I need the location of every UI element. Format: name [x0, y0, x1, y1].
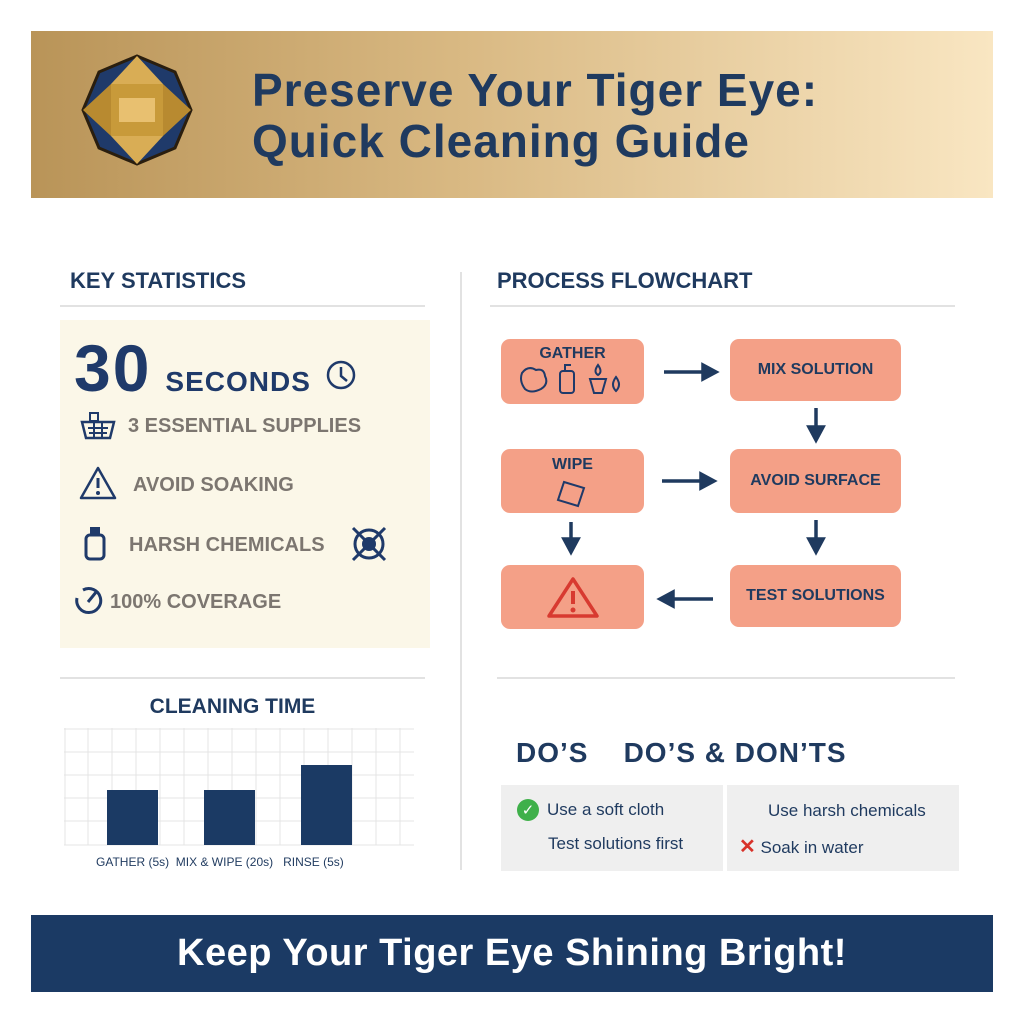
heading: cleaning time: CLEANING TIME: [150, 695, 315, 718]
title: Preserve Your Tiger Eye:: [252, 64, 818, 116]
icon: tiger eye gem: [81, 54, 193, 166]
stat: 30 seconds: SECONDS: [165, 366, 311, 397]
step: wipe: [501, 449, 644, 513]
panel: key statistics: [60, 320, 430, 648]
don't: soak: ✕ Soak in water: [739, 836, 864, 858]
step: gather: GATHER: [539, 345, 606, 362]
stat: supplies: [80, 412, 361, 440]
step: warning: [501, 565, 644, 629]
footer banner: [31, 915, 993, 992]
do: soft cloth: Use a soft cloth: [547, 800, 664, 819]
do: test: Test solutions first: [548, 834, 683, 853]
stat: coverage: 100% COVERAGE: [110, 591, 281, 613]
step: test solutions: [730, 565, 901, 627]
stat: supplies: 3 ESSENTIAL SUPPLIES: [128, 415, 361, 437]
heading: process flowchart: PROCESS FLOWCHART: [497, 268, 752, 293]
step: mix solution: MIX SOLUTION: [758, 361, 873, 378]
heading: key statistics: KEY STATISTICS: [70, 268, 246, 293]
title: [252, 64, 818, 167]
bar chart: [64, 728, 414, 869]
step: wipe: WIPE: [552, 456, 593, 473]
stat: avoid soaking: AVOID SOAKING: [133, 474, 294, 496]
step: gather: [501, 339, 644, 404]
stat: harsh chemicals: HARSH CHEMICALS: [129, 534, 325, 556]
bar chart: GATHER (5s) MIX & WIPE (20s) RINSE (5s): [96, 855, 344, 869]
do: soft cloth: [517, 799, 664, 821]
flowchart: [501, 339, 901, 629]
do: soft cloth: ✓: [522, 802, 534, 819]
stat: coverage: [75, 587, 281, 614]
table: do's and don'ts: [501, 785, 959, 871]
stat: 30 seconds: 30: [74, 331, 151, 405]
step: avoid surface: [730, 449, 901, 513]
stat: harsh chemicals: [84, 527, 386, 561]
step: avoid surface: AVOID SURFACE: [750, 472, 881, 489]
stat: avoid soaking: [80, 466, 294, 500]
heading: do's and don'ts: DO’S DO’S & DON’TS: [516, 737, 847, 768]
don't: harsh: Use harsh chemicals: [768, 801, 926, 820]
footer banner: Keep Your Tiger Eye Shining Bright!: [177, 932, 847, 974]
arrows: [561, 362, 826, 609]
divider: [460, 272, 462, 870]
step: mix solution: [730, 339, 901, 401]
title: Quick Cleaning Guide: [252, 115, 750, 167]
step: test solutions: TEST SOLUTIONS: [746, 587, 885, 604]
stat: 30 seconds: [74, 331, 356, 405]
header banner: [31, 31, 993, 198]
